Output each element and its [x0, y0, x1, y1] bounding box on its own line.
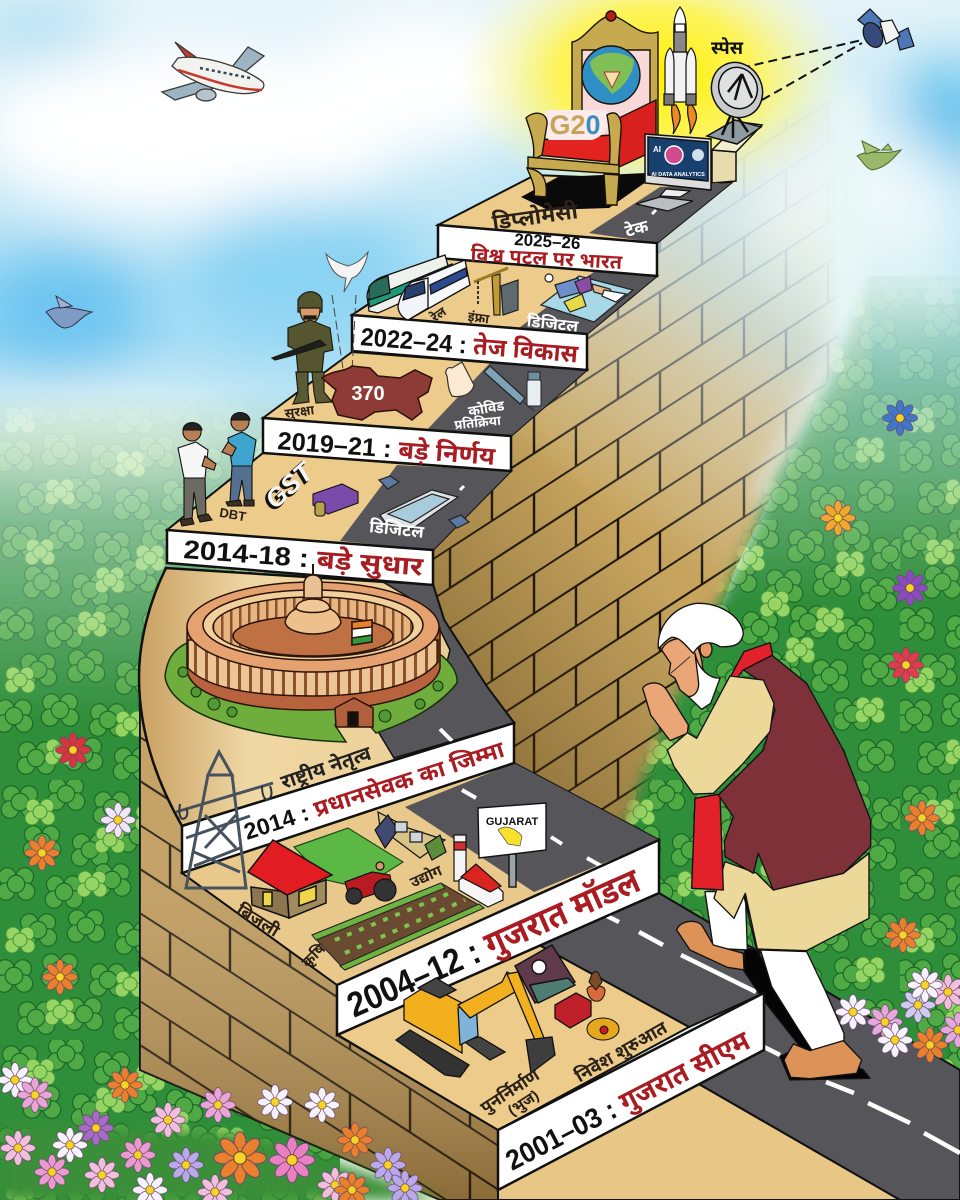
road on 2004-12 step: [405, 763, 659, 892]
label: 2001-03: 2001–03 : गुजरात सीएम: [500, 1024, 756, 1178]
icon: syringe: [484, 366, 534, 411]
step: 2022-24 surface: [352, 258, 657, 334]
icon: trains: [367, 255, 470, 320]
step: 2001-03 surface: [338, 945, 689, 1130]
step labels: small captions: रेल: [428, 304, 449, 325]
step labels: small captions: टेक: [623, 215, 651, 241]
step labels: small captions: डिप्लोमेसी: [491, 198, 580, 235]
vest: [718, 655, 871, 890]
back leg: [705, 892, 747, 950]
icon: satellite: [858, 9, 914, 51]
icon: briefcase: [515, 945, 575, 1003]
left brick wall: [140, 660, 498, 1200]
right bushes: [616, 276, 960, 1069]
icon: dove: [326, 252, 368, 292]
step labels: small captions: कोविड: [467, 397, 506, 419]
icon: factory: [459, 864, 503, 907]
top pedestal: [712, 122, 762, 183]
step labels: small captions: पुनर्निर्माण: [477, 1064, 544, 1118]
label: 2025-26: [438, 225, 657, 276]
workers at desk: [375, 812, 446, 860]
right brick wall: [433, 90, 848, 830]
step labels: small captions: DBT: [218, 505, 247, 524]
front leg: [743, 893, 844, 1052]
map: 370: 370: [351, 383, 385, 405]
icon: gift box: [555, 993, 591, 1028]
figure: man bowing: [643, 603, 871, 1080]
peace lines: [332, 295, 356, 382]
icon: kalash: [587, 972, 605, 1001]
label: 2014: [182, 723, 514, 873]
label: 2025-26: 2025–26: [514, 230, 581, 253]
billboard: GUJARAT: [486, 816, 538, 828]
icon: AI monitor: [645, 134, 711, 190]
icon: tractor: [345, 862, 396, 904]
hair: [658, 603, 743, 653]
ear: [700, 641, 712, 657]
icon: excavator: [396, 972, 555, 1077]
icon: smartphone devices: [379, 476, 469, 529]
flowers: lower right cluster: [836, 968, 960, 1062]
icon: blue bird: [46, 296, 92, 328]
icon: digital tablet: [541, 274, 633, 322]
farm: [312, 883, 484, 970]
label: 2025-26: विश्व पटल पर भारत: [470, 242, 623, 274]
step labels: small captions: निवेश शुरुआत: [571, 1017, 672, 1087]
step: 2025-26 surface: [438, 175, 731, 243]
green field: [294, 828, 403, 888]
step labels: small captions: स्पेस: [711, 38, 744, 58]
spectacles: [671, 657, 690, 673]
label: 2014: 2014 : प्रधानसेवक का जिम्मा: [241, 736, 508, 845]
step: 2014-18 surface: [167, 453, 511, 550]
step labels: small captions: उद्योग: [408, 862, 445, 891]
step labels: small captions: प्रतिक्रिया: [454, 413, 503, 432]
front foot: [784, 1041, 862, 1079]
signal lines: [741, 40, 862, 100]
scarf neck: [696, 643, 773, 750]
step: 2019-21 surface: [263, 352, 587, 436]
shadow: [743, 948, 870, 1080]
icon: AI monitor: AI DATA ANALYTICS: [651, 172, 705, 178]
flowers: right bush: [820, 400, 940, 952]
step labels: small captions: सुरक्षा: [284, 402, 316, 423]
icon: crane and building: [474, 268, 518, 315]
step labels: small captions: कृषि: [299, 940, 330, 972]
label: 2014-18: 2014-18 : बड़े सुधार: [182, 534, 425, 583]
step labels: small captions: बिजली: [233, 899, 284, 941]
house: [248, 840, 332, 918]
icon: throne: G20: [549, 110, 601, 140]
icon: soldier: [272, 292, 333, 404]
road and lower ground: [498, 893, 960, 1200]
icon: AI monitor: AI: [653, 145, 661, 154]
step labels: small captions: इंफ्रा: [467, 309, 491, 327]
icon: money stack: [313, 484, 358, 516]
icon: GST: GST: [259, 455, 320, 514]
beard: [688, 653, 720, 709]
hands: [643, 683, 688, 741]
icon: chimney: [454, 835, 466, 881]
step labels: small captions: [218, 38, 744, 1120]
icon: GST: GST: [257, 457, 318, 516]
label: 2019-21: 2019–21 : बड़े निर्णय: [277, 426, 497, 471]
kurta sleeve: [667, 676, 774, 794]
icon: green bird: [857, 141, 901, 170]
icon: power tower: [176, 752, 273, 888]
step labels: small captions: (भुज): [505, 1087, 543, 1120]
icon: keyboard: [636, 189, 693, 211]
flowers: left bush: [24, 732, 142, 1102]
label: 2004-12: 2004–12 : गुजरात मॉडल: [341, 861, 648, 1027]
figure: man in blue shirt: [222, 412, 256, 506]
step labels: small captions: डिजिटल: [526, 312, 580, 336]
road on 2014 step: [373, 582, 514, 758]
icon: rocket: [664, 7, 696, 134]
icon: throne: [521, 11, 658, 210]
billboard: [478, 803, 546, 887]
flowers: lower left cluster: [0, 1062, 440, 1200]
step labels: small captions: डिजिटल: [368, 516, 425, 542]
back foot: [677, 921, 744, 970]
icon: thali: [587, 1018, 619, 1040]
icon: satellite dish: [703, 54, 771, 144]
icon: vaccine vial: [527, 372, 541, 406]
icon: clapping hands: [446, 362, 474, 397]
map: 370: [322, 366, 432, 420]
step: 2004-12 surface: [182, 763, 659, 985]
kurta lower: [714, 853, 869, 951]
head: [662, 638, 703, 697]
icon: airplane: [162, 42, 264, 101]
parliament: [165, 564, 457, 742]
figure: man in white shirt: [178, 422, 216, 526]
step labels: small captions: राष्ट्रीय नेतृत्व: [277, 740, 375, 795]
left bushes: [0, 380, 340, 1200]
step: 2014 surface: [139, 568, 514, 826]
label: 2022-24: 2022–24 : तेज विकास: [360, 322, 580, 369]
scarf hanging: [692, 794, 723, 890]
